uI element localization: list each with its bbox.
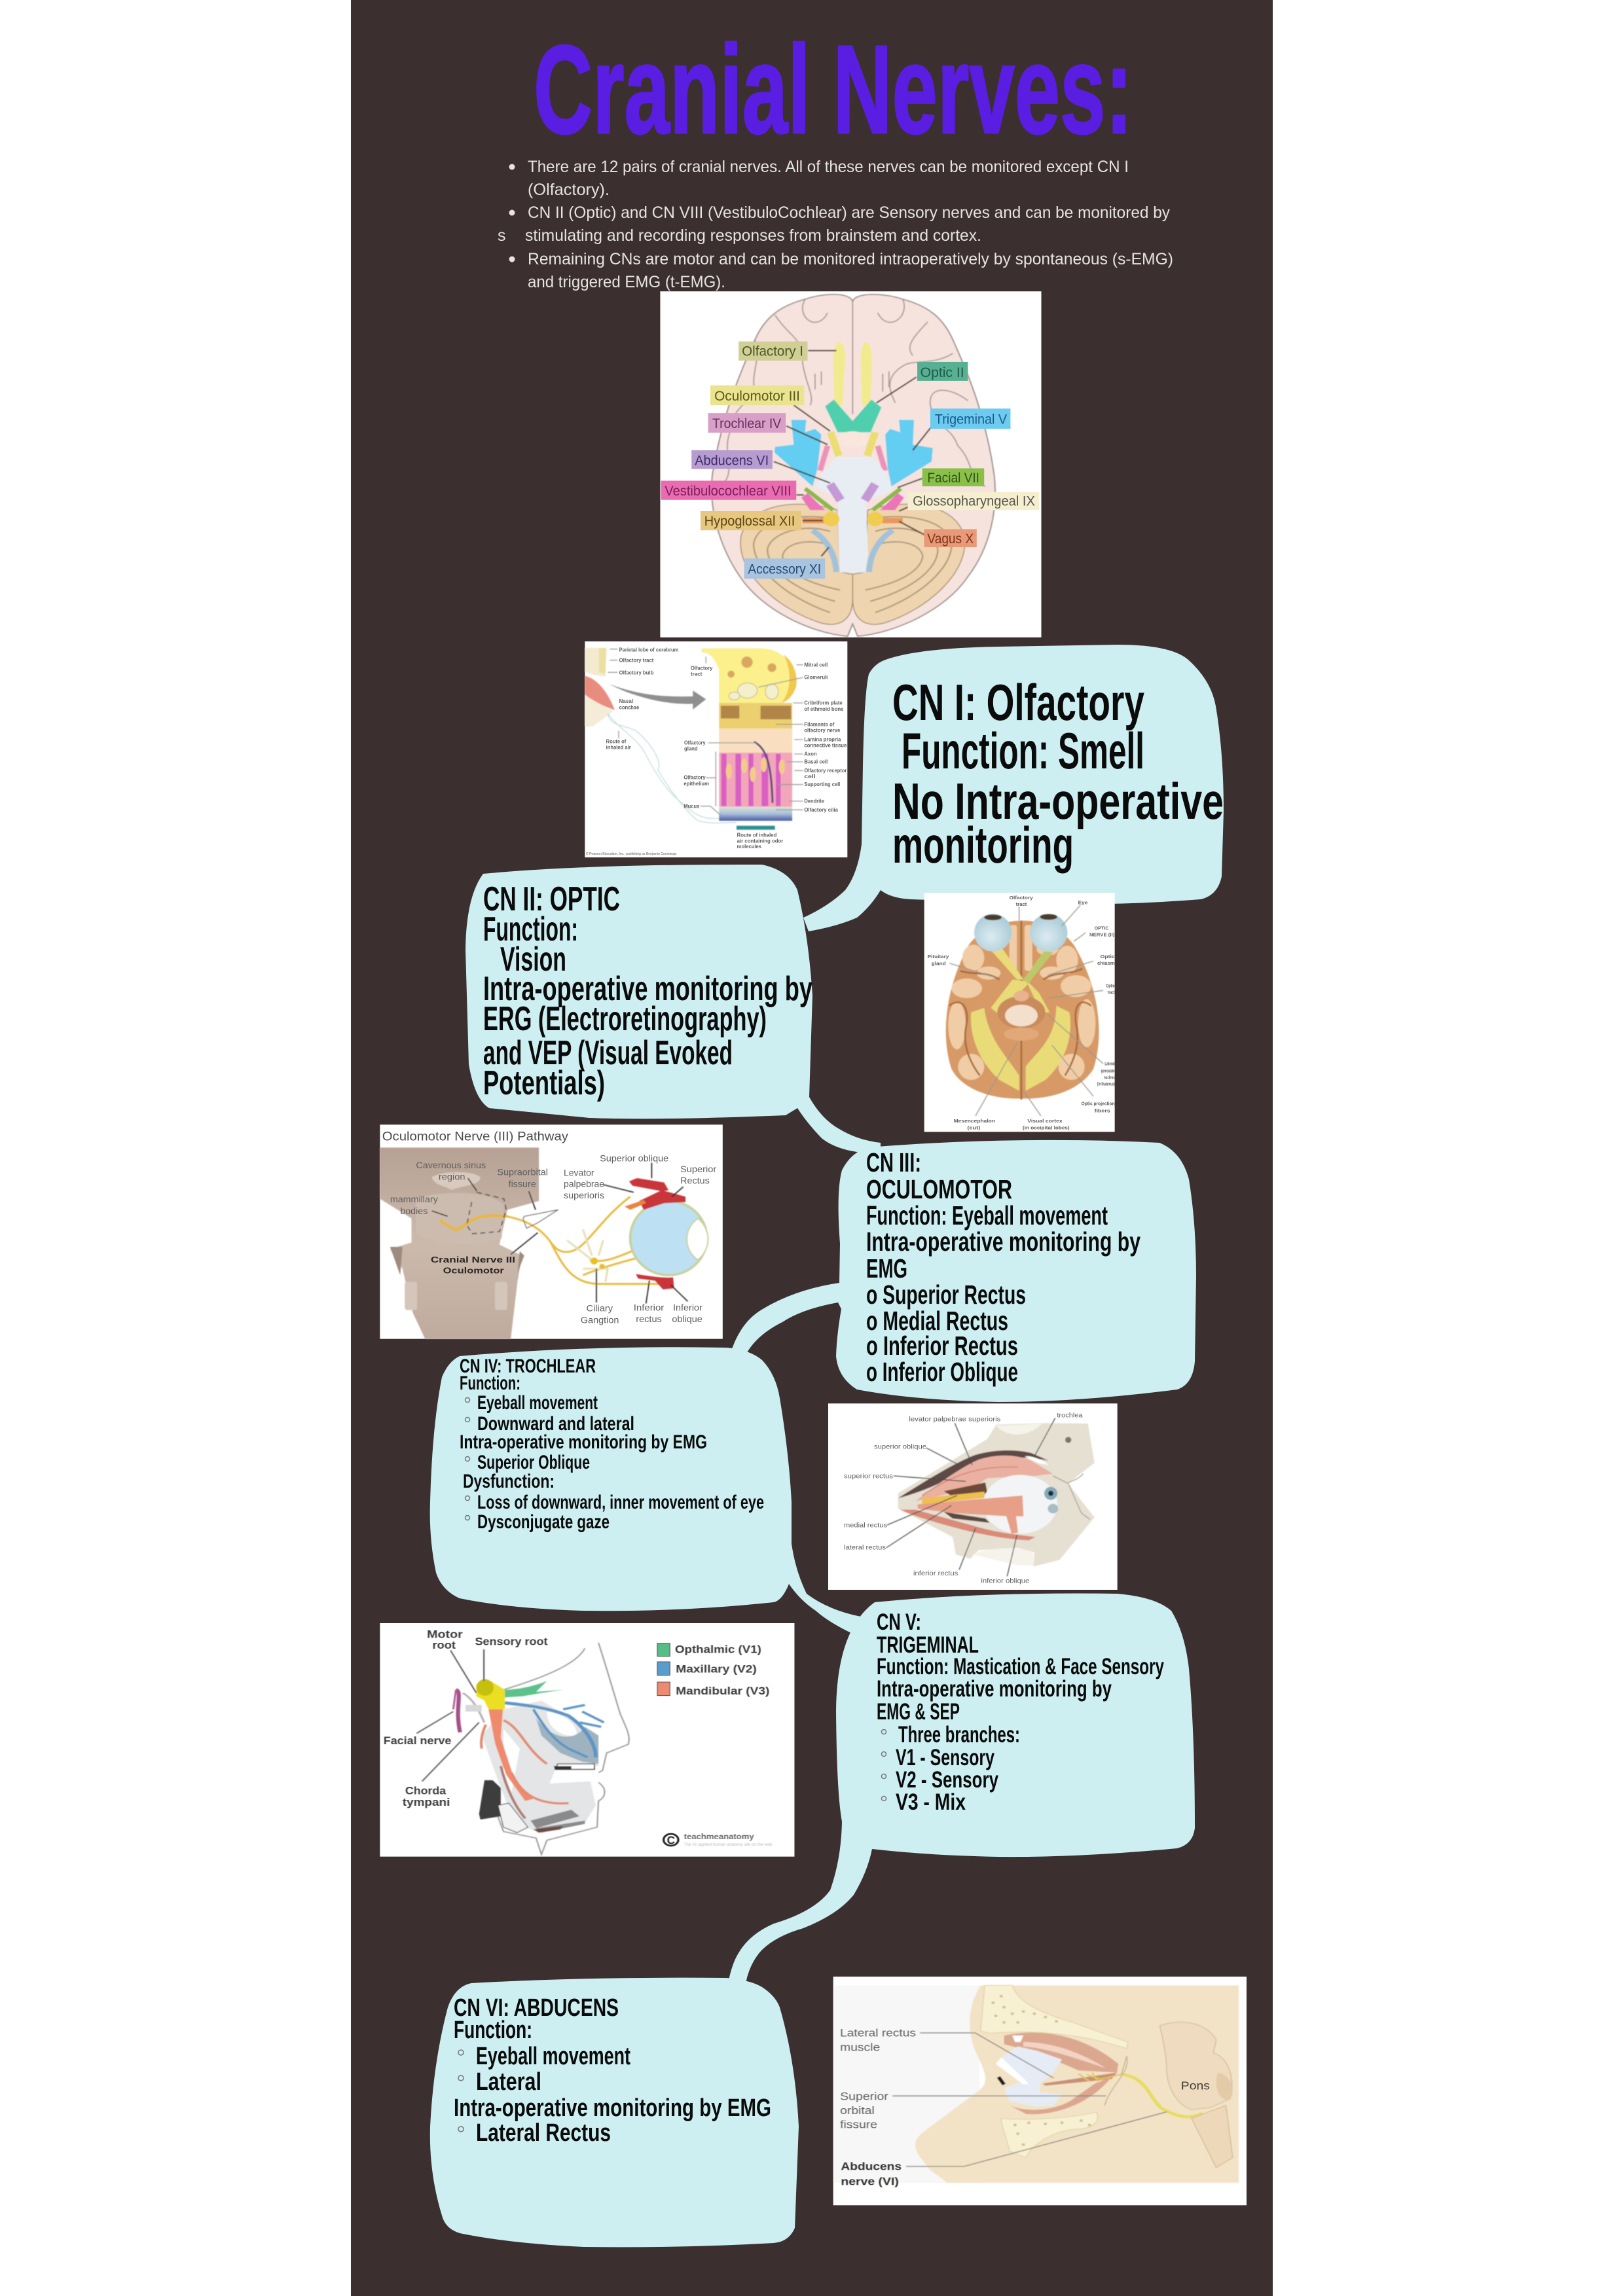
image: visual pathway on underside of brain: NERVE (II) bbox=[1089, 932, 1115, 938]
text: CN V: V1 - Sensory bbox=[896, 1745, 994, 1770]
label: Hypoglossal XII: Hypoglossal XII bbox=[704, 513, 795, 529]
intro bullet list: There are 12 pairs of cranial nerves. All of these nerves can be monitored except CN I bbox=[528, 158, 1129, 176]
label: Accessory XI bbox=[744, 558, 825, 579]
image: olfactory epithelium diagram: Supporting cell bbox=[804, 781, 840, 787]
image: olfactory epithelium diagram: Dendrite bbox=[804, 798, 825, 804]
legend bbox=[657, 1643, 769, 1697]
image: oculomotor nerve pathway: Inferior bbox=[673, 1303, 702, 1314]
text: CN IV: Superior Oblique bbox=[477, 1452, 590, 1473]
image: visual pathway on underside of brain: gland bbox=[932, 961, 946, 967]
text: CN V: EMG & SEP bbox=[877, 1699, 960, 1725]
image: olfactory epithelium diagram: inhaled air bbox=[606, 745, 631, 751]
image: visual pathway on underside of brain: tract bbox=[1108, 989, 1115, 995]
image: olfactory epithelium diagram: Lamina propria bbox=[804, 737, 841, 743]
image: oculomotor nerve pathway: superioris bbox=[564, 1191, 604, 1201]
label: Facial VII: Facial VII bbox=[927, 470, 979, 486]
image: visual pathway on underside of brain: Visual cortex bbox=[1027, 1118, 1063, 1124]
text: CN II: Potentials) bbox=[483, 1064, 605, 1102]
text: CN VI: Lateral Rectus bbox=[476, 2119, 611, 2147]
text: CN VI: CN VI: ABDUCENS bbox=[454, 1994, 619, 2022]
image: oculomotor nerve pathway: fissure bbox=[509, 1179, 536, 1190]
text: CN I: No Intra-operative bbox=[892, 772, 1224, 830]
image: oculomotor nerve pathway: Rectus bbox=[680, 1176, 710, 1186]
text: CN IV: Intra-operative monitoring by EMG bbox=[460, 1431, 707, 1453]
image: oculomotor nerve pathway: Ciliary bbox=[586, 1304, 613, 1314]
panel: CN V trigeminal bubble bbox=[728, 1594, 1195, 1983]
panel: CN IV trochlear bubble bbox=[430, 1347, 861, 1633]
image: visual pathway on underside of brain: (in occipital lobes) bbox=[1023, 1125, 1070, 1131]
pons label: Pons bbox=[1181, 2080, 1210, 2092]
abducens nerve label: nerve (VI) bbox=[841, 2176, 899, 2188]
label: Trochlear IV: Trochlear IV bbox=[712, 416, 781, 431]
text: CN II: CN II: OPTIC bbox=[483, 880, 620, 918]
panel: CN VI abducens bubble bbox=[430, 1978, 799, 2247]
text: CN IV: CN IV: TROCHLEAR bbox=[460, 1355, 596, 1377]
teachmeanatomy credit: teachmeanatomy bbox=[684, 1832, 754, 1841]
image: olfactory epithelium diagram: © Pearson Education, Inc., publishing as Benjamin Cummings bbox=[586, 852, 677, 856]
teachmeanatomy credit bbox=[664, 1832, 773, 1847]
image: olfactory epithelium diagram: gland bbox=[684, 746, 698, 752]
text: CN II: ERG (Electroretinography) bbox=[483, 1000, 767, 1038]
image: oculomotor nerve pathway: Gangtion bbox=[581, 1316, 619, 1326]
text: CN III: EMG bbox=[866, 1253, 907, 1283]
panel: CN I olfactory bubble bbox=[803, 645, 1224, 931]
image: oculomotor nerve pathway: Cavernous sinus bbox=[416, 1160, 486, 1171]
title: Cranial Nerves: bbox=[534, 19, 1133, 160]
image: extraocular muscles: medial rectus bbox=[844, 1522, 887, 1530]
image: visual pathway on underside of brain: Eye bbox=[1078, 900, 1087, 906]
intro bullet list bbox=[498, 158, 1173, 291]
image: olfactory epithelium diagram: molecules bbox=[737, 844, 762, 850]
image: oculomotor nerve pathway: Superior bbox=[680, 1164, 716, 1175]
image: extraocular muscles: trochlea bbox=[1057, 1412, 1083, 1420]
image: trigeminal nerve branches bbox=[380, 1623, 794, 1857]
image inner label: Cranial Nerve III bbox=[431, 1255, 515, 1265]
text: CN III bbox=[866, 1147, 1140, 1387]
text: CN IV: Downward and lateral bbox=[477, 1413, 634, 1435]
image: extraocular muscles: inferior rectus bbox=[913, 1570, 958, 1577]
intro bullet list: s bbox=[498, 226, 505, 245]
image: olfactory epithelium diagram: connective tissue bbox=[804, 743, 847, 749]
image: abducens nerve: fissure bbox=[840, 2119, 877, 2131]
text: CN V: TRIGEMINAL bbox=[877, 1632, 979, 1658]
image: olfactory epithelium diagram: Olfactory tract bbox=[619, 658, 654, 664]
nerve labels: Facial nerve bbox=[384, 1734, 451, 1747]
background panel bbox=[351, 0, 1273, 2296]
text: CN III: CN III: bbox=[866, 1147, 921, 1177]
text: CN IV: Dysfunction: bbox=[463, 1471, 555, 1492]
nerve labels: tympani bbox=[403, 1796, 450, 1808]
label: Trigeminal V bbox=[930, 408, 1010, 429]
image inner label bbox=[431, 1255, 515, 1276]
text: CN V: CN V: bbox=[877, 1609, 921, 1635]
text: CN IV: Loss of downward, inner movement of eye bbox=[477, 1492, 764, 1513]
image: extraocular muscles bbox=[828, 1403, 1118, 1590]
text: CN V: Three branches: bbox=[898, 1722, 1020, 1748]
image: visual pathway on underside of brain: chiasm bbox=[1097, 960, 1115, 966]
text: CN IV: Eyeball movement bbox=[477, 1392, 598, 1414]
image: visual pathway on underside of brain: fibers bbox=[1095, 1107, 1110, 1113]
text: CN I: CN I: Olfactory bbox=[892, 673, 1144, 731]
image: oculomotor nerve pathway: oblique bbox=[672, 1314, 702, 1325]
nerve labels: Chorda bbox=[405, 1785, 447, 1797]
text: CN V: V3 - Mix bbox=[896, 1789, 966, 1815]
image: visual pathway on underside of brain: OPTIC bbox=[1095, 925, 1109, 931]
image: olfactory epithelium diagram: Parietal lobe of cerebrum bbox=[619, 647, 678, 653]
text: CN III: Intra-operative monitoring by bbox=[866, 1227, 1140, 1257]
nerve labels: root bbox=[432, 1639, 456, 1651]
image: olfactory epithelium diagram: Route of inhaled bbox=[737, 832, 776, 838]
label: Glossopharyngeal IX: Glossopharyngeal IX bbox=[913, 493, 1035, 509]
text: CN III: Function: Eyeball movement bbox=[866, 1200, 1108, 1230]
text: CN III: OCULOMOTOR bbox=[866, 1174, 1012, 1204]
text: CN II: Vision bbox=[500, 941, 566, 978]
label: Optic II: Optic II bbox=[921, 365, 964, 380]
text: CN III: o Inferior Rectus bbox=[866, 1331, 1018, 1361]
image: olfactory epithelium diagram: Olfactory bbox=[684, 775, 706, 781]
label: Vestibulocochlear VIII: Vestibulocochlear VIII bbox=[665, 483, 792, 499]
text: CN VI bbox=[454, 1994, 771, 2147]
intro bullet list: CN II (Optic) and CN VIII (VestibuloCochlear) are Sensory nerves and can be monitored by bbox=[528, 204, 1170, 222]
image: extraocular muscles: lateral rectus bbox=[844, 1545, 886, 1552]
image: visual pathway on underside of brain: Olfactory bbox=[1010, 895, 1034, 901]
image inner label: Oculomotor bbox=[443, 1266, 505, 1276]
image: visual pathway on underside of brain: tract bbox=[1016, 901, 1027, 907]
panel: CN III oculomotor bubble bbox=[730, 1140, 1196, 1402]
text: CN I: monitoring bbox=[892, 816, 1074, 874]
legend: Mandibular (V3) bbox=[676, 1685, 769, 1697]
image: oculomotor nerve pathway: Inferior bbox=[634, 1303, 665, 1314]
image: olfactory epithelium diagram: Mitral cell bbox=[804, 662, 828, 668]
text: CN I: Function: Smell bbox=[902, 722, 1144, 780]
text: CN I bbox=[892, 673, 1224, 874]
image: olfactory epithelium diagram: Route of bbox=[606, 738, 627, 744]
text: CN VI: Lateral bbox=[476, 2068, 541, 2096]
image: extraocular muscles: superior oblique bbox=[874, 1444, 927, 1451]
image: abducens nerve: Superior bbox=[840, 2090, 888, 2103]
image: oculomotor nerve pathway: palpebrae bbox=[564, 1179, 604, 1190]
image: visual pathway on underside of brain: (in thalamus) bbox=[1097, 1081, 1115, 1087]
text: CN VI: Function: bbox=[454, 2017, 532, 2044]
label: Abducens VI: Abducens VI bbox=[695, 452, 769, 468]
image: olfactory epithelium diagram: tract bbox=[691, 672, 702, 677]
image: brain base with cranial nerve labels bbox=[660, 291, 1042, 637]
legend: Opthalmic (V1) bbox=[675, 1643, 761, 1655]
image: oculomotor nerve pathway: Supraorbital bbox=[497, 1168, 548, 1178]
text: CN IV: Dysconjugate gaze bbox=[477, 1511, 610, 1533]
image: olfactory epithelium diagram: Mucus bbox=[684, 803, 700, 809]
nerve labels: Motor bbox=[427, 1628, 464, 1640]
teachmeanatomy credit: The #1 applied human anatomy site on the web bbox=[684, 1843, 773, 1847]
text: CN IV: Function: bbox=[460, 1372, 520, 1394]
image: olfactory epithelium diagram: Basal cell bbox=[804, 759, 828, 765]
image: visual pathway on underside of brain: Optic projection bbox=[1082, 1101, 1115, 1107]
image: oculomotor nerve pathway: bodies bbox=[400, 1206, 428, 1217]
text: CN II: Function: bbox=[483, 910, 578, 948]
image: visual pathway on underside of brain: (cut) bbox=[967, 1125, 981, 1131]
image: abducens nerve: orbital bbox=[840, 2105, 875, 2117]
intro bullet list: stimulating and recording responses from brainstem and cortex. bbox=[525, 226, 981, 245]
image: oculomotor nerve pathway: Levator bbox=[564, 1168, 594, 1178]
image: oculomotor nerve pathway: region bbox=[439, 1172, 465, 1182]
abducens nerve label bbox=[841, 2161, 902, 2188]
text: CN IV bbox=[460, 1355, 764, 1533]
label: Accessory XI: Accessory XI bbox=[748, 562, 821, 577]
image: oculomotor nerve pathway: Superior oblique bbox=[600, 1154, 668, 1164]
text: CN II bbox=[483, 880, 812, 1102]
image: oculomotor nerve pathway bbox=[380, 1124, 723, 1339]
image: olfactory epithelium diagram: Olfactory cilia bbox=[804, 807, 839, 813]
image: olfactory epithelium diagram: Olfactory bulb bbox=[619, 670, 653, 675]
image: extraocular muscles: levator palpebrae superioris bbox=[909, 1416, 1000, 1424]
image: olfactory epithelium diagram: olfactory nerve bbox=[804, 728, 841, 734]
legend: Maxillary (V2) bbox=[676, 1663, 757, 1675]
image: visual pathway on underside of brain: Optic bbox=[1101, 954, 1115, 960]
label: Olfactory I: Olfactory I bbox=[742, 343, 803, 359]
label: Oculomotor III: Oculomotor III bbox=[714, 388, 800, 404]
image: olfactory epithelium diagram: Olfactory receptor bbox=[804, 768, 847, 774]
image: olfactory epithelium diagram: Filaments of bbox=[804, 721, 835, 727]
text: CN II: and VEP (Visual Evoked bbox=[483, 1034, 733, 1072]
image: olfactory epithelium diagram: Axon bbox=[804, 751, 817, 757]
image: olfactory epithelium diagram: epithelium bbox=[684, 781, 709, 787]
text: CN III: o Medial Rectus bbox=[866, 1306, 1008, 1336]
image: visual pathway on underside of brain: geniculate bbox=[1101, 1068, 1115, 1074]
image: visual pathway on underside of brain bbox=[924, 893, 1115, 1132]
text: CN V: Function: Mastication & Face Sensory bbox=[877, 1654, 1164, 1679]
image: olfactory epithelium diagram: cell bbox=[804, 774, 816, 780]
intro bullet list: Remaining CNs are motor and can be monitored intraoperatively by spontaneous (s-EMG) bbox=[528, 250, 1173, 268]
text: CN VI: Eyeball movement bbox=[476, 2043, 630, 2070]
nerve labels: Sensory root bbox=[475, 1635, 548, 1647]
image: visual pathway on underside of brain: nucleus bbox=[1104, 1075, 1115, 1081]
text: CN III: o Inferior Oblique bbox=[866, 1357, 1018, 1387]
image: oculomotor nerve pathway: rectus bbox=[636, 1314, 662, 1325]
label: Vagus X: Vagus X bbox=[927, 531, 974, 547]
image: abducens nerve: Lateral rectus bbox=[840, 2028, 916, 2039]
image: olfactory epithelium diagram bbox=[585, 641, 847, 857]
image: oculomotor nerve pathway: mammillary bbox=[390, 1194, 439, 1205]
image: abducens nerve: muscle bbox=[840, 2041, 880, 2054]
text: CN III: o Superior Rectus bbox=[866, 1280, 1026, 1310]
teachmeanatomy credit: C bbox=[667, 1835, 675, 1847]
text: CN VI: Intra-operative monitoring by EMG bbox=[454, 2094, 771, 2122]
nerve labels bbox=[384, 1628, 548, 1808]
intro bullet list: (Olfactory). bbox=[528, 181, 610, 199]
text: CN V: V2 - Sensory bbox=[896, 1767, 998, 1793]
image: olfactory epithelium diagram: conchae bbox=[619, 704, 640, 710]
image: olfactory epithelium diagram: Olfactory bbox=[684, 740, 706, 746]
panel: CN II optic bubble bbox=[465, 865, 881, 1158]
image: olfactory epithelium diagram: Olfactory bbox=[691, 665, 713, 671]
text: CN V: Intra-operative monitoring by bbox=[877, 1676, 1112, 1702]
text: CN II: Intra-operative monitoring by bbox=[483, 970, 812, 1008]
image: extraocular muscles: inferior oblique bbox=[981, 1577, 1030, 1585]
label: Trigeminal V: Trigeminal V bbox=[935, 411, 1007, 427]
image: visual pathway on underside of brain: Pituitary bbox=[928, 954, 949, 960]
image: olfactory epithelium diagram: Glomeruli bbox=[804, 675, 828, 681]
image: visual pathway on underside of brain: Lateral bbox=[1104, 1060, 1115, 1066]
image: olfactory epithelium diagram: Nasal bbox=[619, 698, 633, 704]
text: CN V bbox=[877, 1609, 1164, 1815]
image: olfactory epithelium diagram: Cribriform plate bbox=[804, 700, 843, 706]
image: visual pathway on underside of brain: Mesencephalon bbox=[954, 1118, 996, 1124]
image: olfactory epithelium diagram: of ethmoid bone bbox=[804, 706, 844, 712]
label: Trochlear IV bbox=[708, 413, 786, 433]
abducens nerve label: Abducens bbox=[841, 2161, 902, 2173]
image: extraocular muscles: superior rectus bbox=[844, 1473, 893, 1480]
image: visual pathway on underside of brain: Optic bbox=[1106, 982, 1115, 988]
image: abducens nerve bbox=[833, 1977, 1247, 2205]
image: olfactory epithelium diagram: air containing odor bbox=[737, 838, 783, 844]
image title: Oculomotor Nerve (III) Pathway bbox=[382, 1130, 568, 1143]
intro bullet list: and triggered EMG (t-EMG). bbox=[528, 273, 725, 291]
